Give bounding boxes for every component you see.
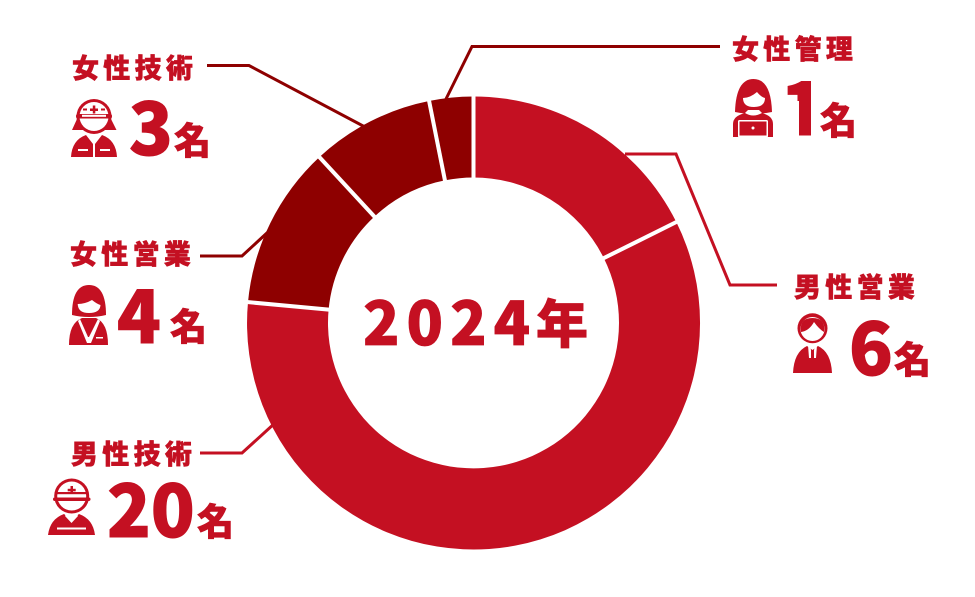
count: 4 — [117, 259, 161, 364]
label: 女性営業 — [70, 233, 195, 272]
icon: female worker with helmet — [71, 99, 117, 157]
segment: female management 1 — [429, 96, 474, 180]
unit: 名 — [197, 492, 234, 546]
count: 1 — [781, 51, 825, 156]
leader line: male sales — [625, 154, 777, 285]
group: female management — [732, 34, 854, 138]
group: female technical — [71, 47, 211, 176]
icon: female at laptop — [733, 79, 773, 138]
donut chart — [244, 92, 700, 549]
group: male sales — [793, 266, 931, 396]
center year label: 2024 — [363, 276, 537, 363]
group: female sales — [69, 233, 207, 364]
leader line: female management — [445, 46, 720, 101]
icon: female in suit — [69, 285, 108, 345]
icon: male worker with helmet — [48, 478, 95, 535]
count: 3 — [129, 71, 173, 176]
unit: 名 — [894, 330, 931, 384]
unit: 名 — [170, 297, 207, 351]
unit: 名 — [174, 111, 211, 165]
leader line: female technical — [207, 66, 365, 127]
icon: male in suit — [793, 313, 832, 373]
label: 男性技術 — [71, 433, 196, 472]
segment: male sales 6 — [474, 96, 676, 258]
group: male technical — [48, 433, 234, 558]
count: 6 — [849, 291, 893, 396]
unit: 名 — [820, 91, 857, 145]
segment: female sales 4 — [248, 157, 374, 310]
label: 女性管理 — [732, 28, 857, 67]
count: 20 — [107, 453, 195, 558]
segment: male technical 20 — [247, 222, 700, 549]
leader line: female sales — [200, 232, 268, 256]
center year label: 年 — [536, 283, 588, 358]
leader line: male technical — [200, 423, 275, 453]
label: 女性技術 — [72, 47, 197, 86]
label: 男性営業 — [794, 266, 919, 305]
segment: female technical 3 — [320, 101, 445, 216]
